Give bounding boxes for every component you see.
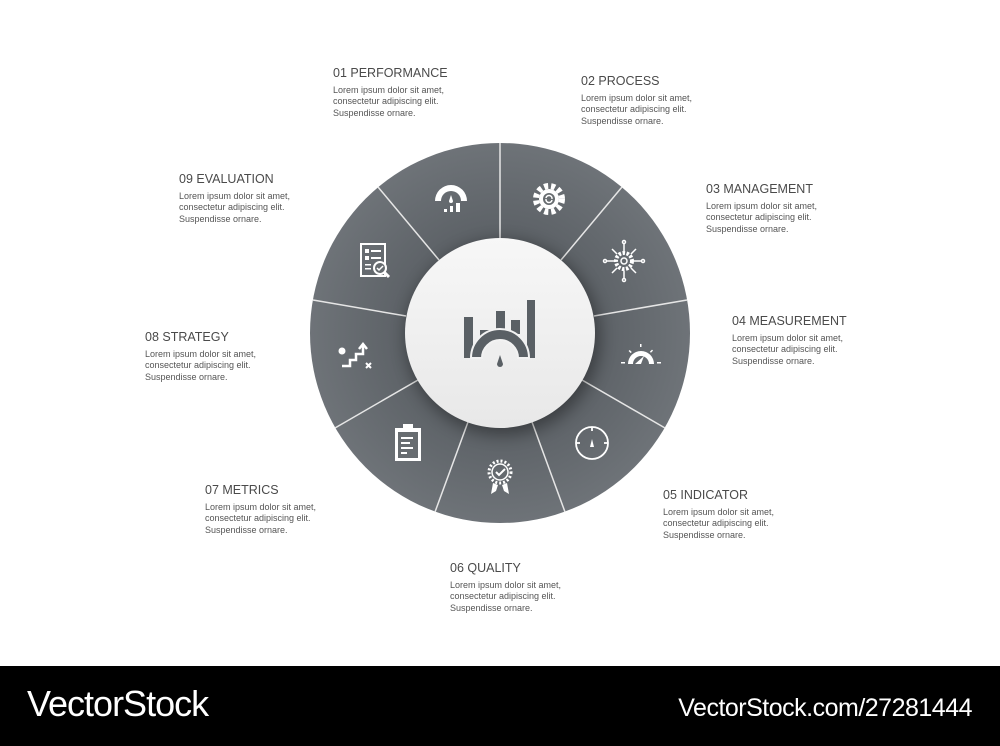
label: 09 evaluation: [179, 172, 290, 224]
label: 09 evaluation: 09 EVALUATION: [179, 172, 274, 186]
icon: 06 quality badge: [489, 461, 511, 494]
label: 05 indicator: Suspendisse ornare.: [663, 530, 746, 540]
label: 06 quality: Suspendisse ornare.: [450, 603, 533, 613]
label: 08 strategy: consectetur adipiscing elit.: [145, 360, 251, 370]
icon: 03 management network gear: [604, 240, 644, 282]
icon: 05 indicator dial: [576, 427, 608, 459]
icon: 09 evaluation checklist: [361, 244, 389, 277]
label: 02 process: consectetur adipiscing elit.: [581, 104, 687, 114]
icon: 07 metrics clipboard: [395, 424, 421, 461]
label: 09 evaluation: Suspendisse ornare.: [179, 214, 262, 224]
label: 05 indicator: Lorem ipsum dolor sit amet,: [663, 507, 774, 517]
label: 01 performance: Lorem ipsum dolor sit amet,: [333, 85, 444, 95]
label: 01 performance: [333, 66, 448, 118]
label: 08 strategy: Lorem ipsum dolor sit amet,: [145, 349, 256, 359]
label: 08 strategy: 08 STRATEGY: [145, 330, 229, 344]
label: 01 performance: consectetur adipiscing elit.: [333, 96, 439, 106]
label: 04 measurement: Lorem ipsum dolor sit amet,: [732, 333, 843, 343]
label: 03 management: consectetur adipiscing elit.: [706, 212, 812, 222]
label: 07 metrics: Lorem ipsum dolor sit amet,: [205, 502, 316, 512]
label: 08 strategy: [145, 330, 256, 382]
label: 02 process: [581, 74, 692, 126]
label: 03 management: 03 MANAGEMENT: [706, 182, 813, 196]
icon: center chart gauge: [464, 300, 535, 367]
label: 04 measurement: 04 MEASUREMENT: [732, 314, 847, 328]
label: 01 performance: Suspendisse ornare.: [333, 108, 416, 118]
label: 01 performance: 01 PERFORMANCE: [333, 66, 448, 80]
label: 04 measurement: consectetur adipiscing elit.: [732, 344, 838, 354]
label: 05 indicator: 05 INDICATOR: [663, 488, 748, 502]
icon: 04 measurement speedometer: [621, 344, 661, 364]
label: 07 metrics: [205, 483, 316, 535]
footer url: VectorStock.com/27281444: [678, 694, 972, 722]
inner circle: [405, 238, 600, 435]
label: 03 management: Suspendisse ornare.: [706, 224, 789, 234]
icon: 01 performance gauge: [435, 185, 467, 212]
label: 02 process: Suspendisse ornare.: [581, 116, 664, 126]
icon: 02 process gear: [536, 186, 562, 212]
label: 09 evaluation: Lorem ipsum dolor sit amet,: [179, 191, 290, 201]
label: 05 indicator: [663, 488, 774, 540]
label: 04 measurement: [732, 314, 847, 366]
label: 08 strategy: Suspendisse ornare.: [145, 372, 228, 382]
label: 02 process: 02 PROCESS: [581, 74, 660, 88]
label: 07 metrics: 07 METRICS: [205, 483, 279, 497]
label: 03 management: [706, 182, 817, 234]
icon: 08 strategy stairs: [338, 344, 371, 368]
label: 02 process: Lorem ipsum dolor sit amet,: [581, 93, 692, 103]
label: 07 metrics: consectetur adipiscing elit.: [205, 513, 311, 523]
outer ring: [310, 143, 690, 523]
label: 05 indicator: consectetur adipiscing elit.: [663, 518, 769, 528]
label: 06 quality: [450, 561, 561, 613]
label: 07 metrics: Suspendisse ornare.: [205, 525, 288, 535]
label: 06 quality: Lorem ipsum dolor sit amet,: [450, 580, 561, 590]
label: 06 quality: consectetur adipiscing elit.: [450, 591, 556, 601]
label: 06 quality: 06 QUALITY: [450, 561, 521, 575]
footer logo: VectorStock: [27, 683, 208, 724]
label: 03 management: Lorem ipsum dolor sit amet,: [706, 201, 817, 211]
footer bar: [0, 666, 1000, 746]
label: 04 measurement: Suspendisse ornare.: [732, 356, 815, 366]
label: 09 evaluation: consectetur adipiscing elit.: [179, 202, 285, 212]
